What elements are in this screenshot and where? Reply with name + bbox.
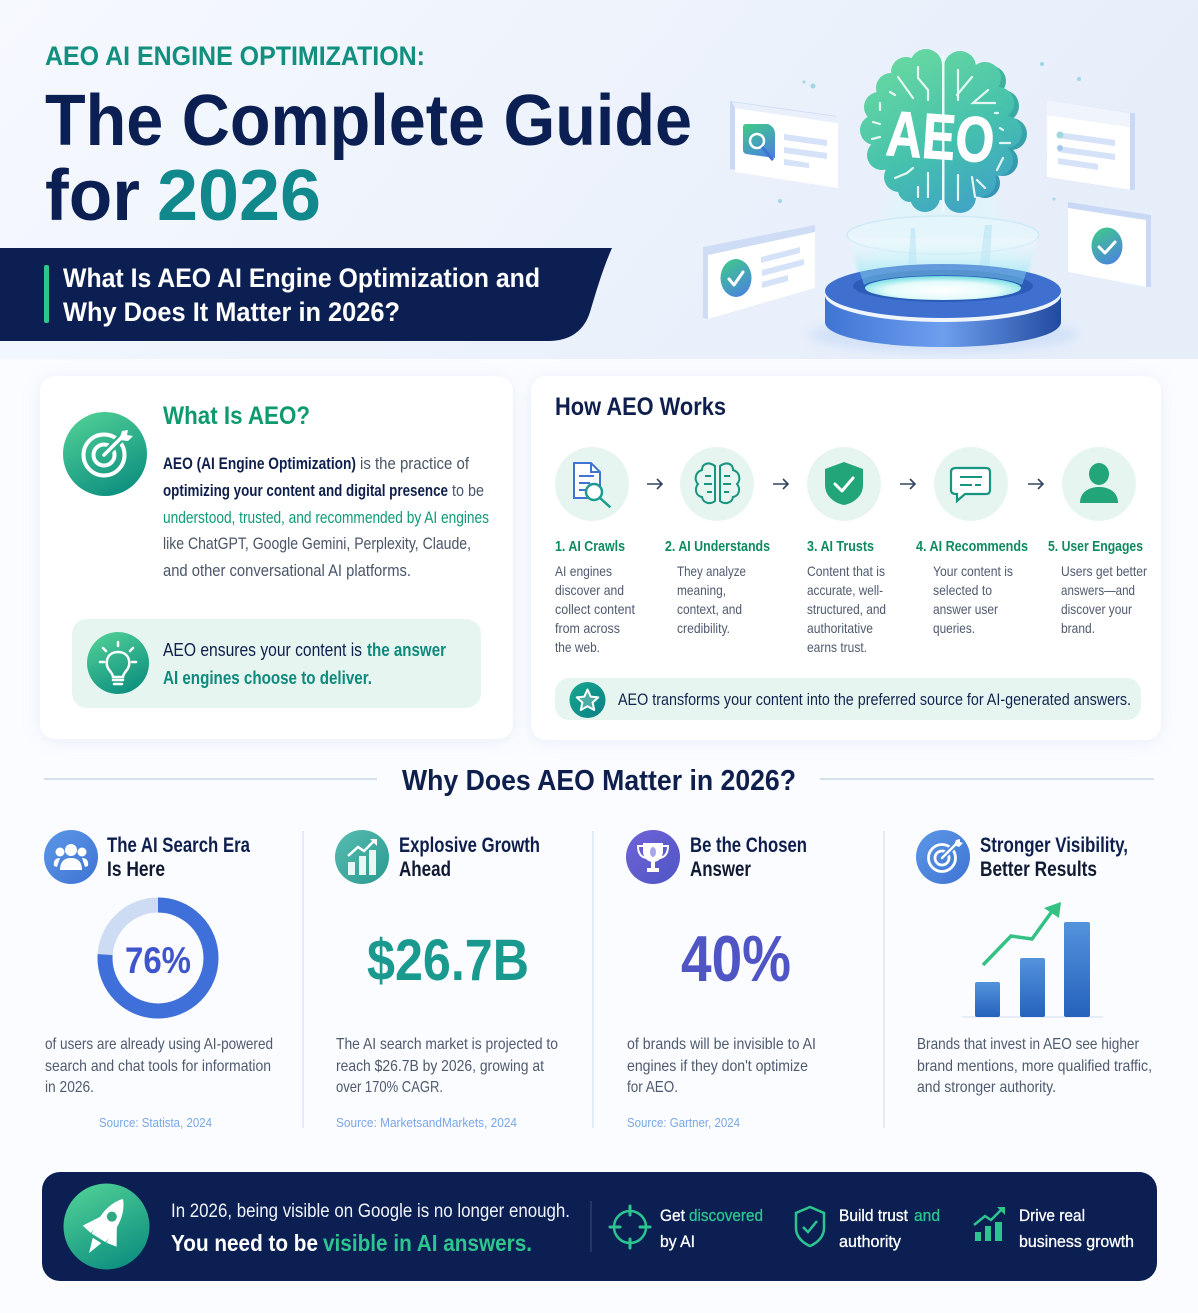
- eyebrow heading: AEO AI ENGINE OPTIMIZATION:: [45, 41, 425, 71]
- step 4: AI recommends: queries.: [933, 620, 975, 636]
- panel: stronger visibility: [916, 830, 1152, 1096]
- description: [917, 1036, 1152, 1096]
- stat: $26.7B: [367, 928, 529, 993]
- benefit: build trust: and: [914, 1206, 940, 1225]
- step 1: AI crawls: 1. AI Crawls: [555, 539, 625, 555]
- panel: what is AEO: [40, 376, 513, 739]
- benefit: build trust: [796, 1206, 940, 1251]
- step 3: AI trusts: Content that is: [807, 563, 885, 579]
- step 5: user engages: [1048, 447, 1147, 636]
- description: [336, 1036, 558, 1096]
- benefit: business growth: Drive real: [1019, 1206, 1085, 1225]
- card title: Stronger Visibility,: [980, 834, 1128, 857]
- card title: [399, 834, 540, 881]
- hologram cone: [847, 160, 1039, 296]
- step 2: AI understands: They analyze: [677, 563, 746, 579]
- illustration: AEO brain on platform: [703, 49, 1151, 353]
- message: visible in AI answers.: [323, 1230, 532, 1256]
- panel: explosive growth: [335, 830, 558, 1130]
- stat: 40%: [681, 922, 791, 995]
- main title: [45, 81, 692, 236]
- source: Source: Gartner, 2024: [627, 1116, 740, 1130]
- icon: light bulb: [87, 632, 149, 694]
- card title: Better Results: [980, 858, 1097, 881]
- arrow: [900, 479, 915, 489]
- step 3: AI trusts: structured, and: [807, 601, 886, 617]
- step 1: AI crawls: the web.: [555, 639, 600, 655]
- step 2: AI understands: meaning,: [677, 582, 726, 598]
- definition text: is the practice of: [360, 454, 469, 473]
- step 3: AI trusts: 3. AI Trusts: [807, 539, 874, 555]
- benefit: get discovered: [610, 1206, 763, 1251]
- definition text: and other conversational AI platforms.: [163, 561, 411, 580]
- icon: target: [63, 412, 147, 496]
- definition text: understood, trusted, and recommended by AI engines: [163, 508, 489, 527]
- step 4: AI recommends: selected to: [933, 582, 992, 598]
- panel: how AEO works: [531, 376, 1161, 740]
- step 3: AI trusts: authoritative: [807, 620, 873, 636]
- definition text: like ChatGPT, Google Gemini, Perplexity, Claude,: [163, 534, 471, 553]
- AEO label: AEO: [884, 97, 997, 176]
- step 5: user engages: 5. User Engages: [1048, 539, 1143, 555]
- main title: 2026: [157, 156, 321, 236]
- description: and stronger authority.: [917, 1079, 1056, 1096]
- benefit: get discovered: by AI: [660, 1232, 695, 1251]
- step 5: user engages: answers—and: [1061, 582, 1135, 598]
- step 2: AI understands: [665, 447, 770, 636]
- banner: section question: What Is AEO AI Engine Optimization and: [63, 263, 540, 293]
- step 2: AI understands: credibility.: [677, 620, 730, 636]
- step 1: AI crawls: AI engines: [555, 563, 612, 579]
- icon: trophy: [626, 830, 680, 884]
- step 3: AI trusts: [807, 447, 886, 655]
- description: [45, 1036, 273, 1096]
- step 1: AI crawls: [555, 447, 635, 655]
- description: reach $26.7B by 2026, growing at: [336, 1058, 544, 1075]
- icon: users: [44, 830, 98, 884]
- definition text: to be: [452, 481, 484, 500]
- callout text: AEO ensures your content is: [163, 639, 362, 660]
- step 2: AI understands: context, and: [677, 601, 742, 617]
- benefit: build trust: authority: [839, 1232, 901, 1251]
- callout text: the answer: [367, 639, 446, 660]
- particles: [778, 62, 1081, 203]
- message: [171, 1201, 570, 1256]
- description: brand mentions, more qualified traffic,: [917, 1058, 1152, 1075]
- card title: [107, 834, 250, 881]
- card title: Is Here: [107, 858, 165, 881]
- step 5: user engages: discover your: [1061, 601, 1132, 617]
- main title: The Complete Guide: [45, 81, 692, 161]
- callout text: [163, 639, 446, 688]
- icon: growth chart: [335, 830, 389, 884]
- main title: for: [45, 156, 140, 236]
- icon: target: [916, 830, 970, 884]
- description: for AEO.: [627, 1079, 678, 1096]
- step 5: user engages: brand.: [1061, 620, 1095, 636]
- card title: [980, 834, 1128, 881]
- benefit: business growth: [974, 1206, 1134, 1251]
- panel: chosen answer: [626, 830, 816, 1130]
- floating card: search: [730, 101, 838, 188]
- callout: AEO answer: [72, 619, 481, 708]
- description: of brands will be invisible to AI: [627, 1036, 816, 1053]
- step 4: AI recommends: 4. AI Recommends: [916, 539, 1028, 555]
- message: You need to be: [171, 1230, 318, 1256]
- source: Source: Statista, 2024: [99, 1116, 212, 1130]
- step 4: AI recommends: Your content is: [933, 563, 1013, 579]
- description: search and chat tools for information: [45, 1058, 271, 1075]
- step 5: user engages: Users get better: [1061, 563, 1147, 579]
- callout: preferred source: [555, 678, 1141, 720]
- benefit: get discovered: discovered: [689, 1206, 763, 1225]
- floating card: check: [1068, 202, 1151, 287]
- step 1: AI crawls: collect content: [555, 601, 635, 617]
- heading: why AEO matters: Why Does AEO Matter in 2026?: [402, 765, 796, 797]
- benefit: build trust: Build trust: [839, 1206, 908, 1225]
- definition text: AEO (AI Engine Optimization): [163, 454, 356, 473]
- card title: Be the Chosen: [690, 834, 807, 857]
- panel: AI search era: [44, 830, 273, 1130]
- card title: Explosive Growth: [399, 834, 540, 857]
- banner: section question: [0, 248, 612, 341]
- callout text: AI engines choose to deliver.: [163, 667, 372, 688]
- platform: [808, 238, 1078, 353]
- benefit: business growth: business growth: [1019, 1232, 1134, 1251]
- banner: section question: Why Does It Matter in 2026?: [63, 297, 400, 327]
- panel: hero header: [0, 0, 1198, 359]
- benefit: get discovered: Get: [660, 1206, 685, 1225]
- step 3: AI trusts: earns trust.: [807, 639, 867, 655]
- heading: How AEO Works: [555, 393, 726, 421]
- donut chart: 76%: 76%: [125, 940, 191, 981]
- circuit traces: [872, 67, 1010, 200]
- brain: [860, 49, 1027, 213]
- icon: rocket: [64, 1184, 150, 1270]
- description: over 170% CAGR.: [336, 1079, 443, 1096]
- definition text: [163, 454, 489, 580]
- heading: What Is AEO?: [163, 402, 310, 430]
- message: In 2026, being visible on Google is no longer enough.: [171, 1201, 570, 1222]
- step 4: AI recommends: answer user: [933, 601, 998, 617]
- floating card: check with lines: [703, 225, 815, 319]
- description: in 2026.: [45, 1079, 94, 1096]
- floating card: list: [1047, 100, 1135, 190]
- description: engines if they don't optimize: [627, 1058, 808, 1075]
- description: of users are already using AI-powered: [45, 1036, 273, 1053]
- card title: [690, 834, 807, 881]
- card title: Answer: [690, 858, 751, 881]
- source: Source: MarketsandMarkets, 2024: [336, 1116, 517, 1130]
- description: The AI search market is projected to: [336, 1036, 558, 1053]
- arrow: [773, 479, 788, 489]
- donut chart: 76%: [105, 905, 211, 1011]
- arrow: [1028, 479, 1043, 489]
- step 1: AI crawls: from across: [555, 620, 620, 636]
- description: Brands that invest in AEO see higher: [917, 1036, 1140, 1053]
- arrow: [647, 479, 662, 489]
- card title: Ahead: [399, 858, 451, 881]
- step 1: AI crawls: discover and: [555, 582, 624, 598]
- definition text: optimizing your content and digital presence: [163, 481, 448, 500]
- card title: The AI Search Era: [107, 834, 250, 857]
- step 2: AI understands: 2. AI Understands: [665, 539, 770, 555]
- panel: bottom call to action: [42, 1172, 1157, 1281]
- bar chart with growth arrow: [962, 902, 1103, 1017]
- step 3: AI trusts: accurate, well-: [807, 582, 883, 598]
- description: [627, 1036, 816, 1096]
- step 4: AI recommends: [916, 447, 1028, 636]
